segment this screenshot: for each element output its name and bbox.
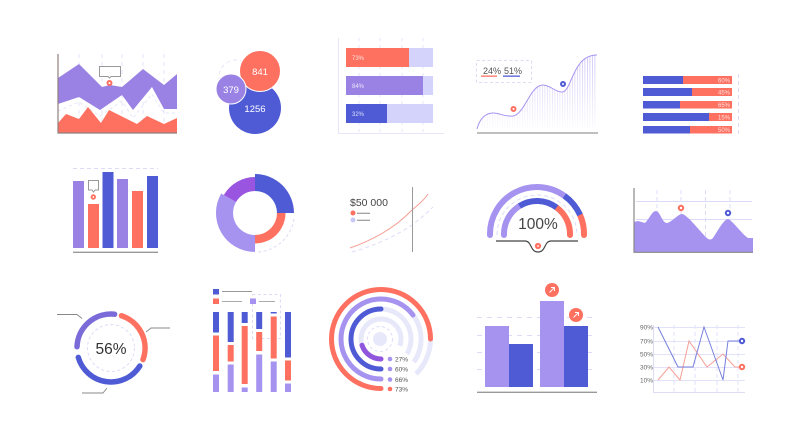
red curve	[350, 194, 428, 248]
legend callout	[476, 60, 532, 82]
purple arc	[77, 314, 115, 347]
blue marker	[726, 211, 730, 215]
marker	[108, 81, 112, 85]
baseline	[73, 251, 158, 253]
panel: line chart	[640, 324, 745, 392]
callout box	[100, 66, 120, 78]
red marker	[740, 365, 744, 369]
column 1	[213, 312, 219, 392]
infographic chart collection	[57, 38, 753, 394]
blue ring	[351, 309, 381, 369]
panel: 56% ring	[57, 314, 170, 393]
bar 84%: 84%	[352, 84, 365, 90]
marker	[92, 195, 95, 199]
purple area	[58, 64, 177, 110]
callout	[88, 180, 98, 192]
wave line	[477, 55, 597, 129]
value label: $50 000	[350, 197, 388, 209]
arrow badge 2	[569, 308, 583, 322]
panel: vertical bar chart	[73, 168, 158, 252]
inner arc	[504, 201, 570, 235]
centre dashed circle	[368, 326, 392, 352]
legend callout: 24%	[483, 66, 501, 76]
column 5	[271, 312, 277, 392]
centre dot	[373, 332, 387, 346]
bars group 2	[540, 301, 588, 387]
panel: mountain area chart	[634, 188, 753, 252]
bubble 1256: 1256	[244, 104, 266, 115]
dashed white line	[58, 94, 177, 118]
area	[634, 211, 753, 252]
row 60%: 60%	[718, 78, 731, 84]
axis	[634, 188, 753, 252]
outer arc	[490, 187, 584, 235]
notch line	[496, 241, 578, 252]
legend	[388, 356, 408, 394]
panel: bubble chart	[216, 50, 281, 134]
leader lines	[57, 314, 170, 393]
legend: 66%	[395, 377, 408, 384]
baseline	[477, 391, 597, 393]
tracks	[361, 309, 430, 374]
red marker	[512, 107, 516, 111]
light purple segment	[216, 194, 255, 252]
red ring	[332, 290, 430, 388]
legend: 27%	[395, 356, 408, 364]
panel: horizontal progress bars	[338, 38, 444, 134]
row 65%: 65%	[718, 103, 731, 109]
bubble 379: 379	[223, 85, 239, 96]
bar 32%: 32%	[352, 112, 365, 118]
bars	[73, 172, 158, 248]
gauge value: 100%	[518, 216, 558, 233]
legend	[213, 289, 275, 304]
marker	[536, 244, 540, 248]
axis labels: 50%	[640, 352, 653, 358]
dashed box	[252, 294, 280, 338]
red marker	[679, 206, 683, 210]
dark purple segment	[224, 177, 255, 202]
axis labels: 10%	[640, 378, 653, 384]
axis labels	[640, 324, 653, 384]
axis labels: 90%	[640, 324, 653, 332]
bars group 1	[485, 326, 533, 387]
bubble 841: 841	[252, 67, 268, 78]
legend	[350, 210, 370, 222]
blue marker	[740, 339, 744, 343]
value: 56%	[95, 341, 127, 358]
panel: stacked columns	[213, 289, 291, 392]
blue marker	[561, 82, 565, 86]
axis labels: 30%	[640, 364, 653, 372]
axis labels: 70%	[640, 338, 653, 346]
panel: hatched wave chart	[476, 55, 598, 133]
panel: donut chart	[216, 174, 294, 252]
legend: 60%	[395, 366, 408, 374]
dashed curve	[352, 207, 433, 252]
red segment	[255, 213, 286, 244]
arrow badge 1	[545, 283, 559, 297]
hatching	[482, 56, 596, 124]
legend callout: 51%	[504, 66, 522, 76]
blue arc	[78, 357, 140, 382]
blue series	[658, 327, 742, 380]
axis	[58, 54, 177, 133]
dark purple ring	[362, 345, 381, 359]
column 2	[228, 312, 234, 392]
column 3	[242, 312, 248, 392]
column 6	[285, 312, 291, 392]
vertical marker line	[412, 187, 414, 252]
panel: gauge	[490, 187, 584, 252]
bar 73%: 73%	[352, 56, 365, 62]
panel: grouped bar chart	[477, 283, 597, 392]
panel: radial progress chart	[332, 290, 430, 394]
baseline	[477, 132, 598, 134]
legend: 73%	[395, 386, 408, 394]
red arc	[122, 316, 145, 360]
panel: stacked area chart	[58, 54, 177, 133]
row 15%: 15%	[718, 116, 731, 122]
row 50%: 50%	[718, 128, 731, 134]
panel: stacked horizontal bars	[643, 74, 738, 134]
row 45%: 45%	[718, 90, 731, 96]
column 4	[256, 312, 262, 392]
red series	[658, 341, 742, 380]
blue segment	[255, 174, 294, 213]
purple ring	[341, 299, 413, 379]
red area	[58, 107, 177, 133]
panel: growth line chart	[350, 187, 433, 252]
